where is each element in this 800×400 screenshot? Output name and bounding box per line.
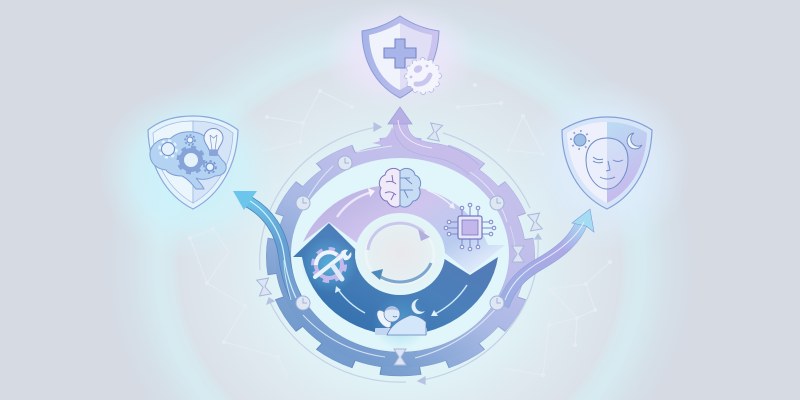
icon: sleeping person: [372, 294, 428, 350]
shield: cognition: [148, 116, 238, 209]
shield: health and pathogen defence: [362, 16, 439, 98]
cycle: lower recovery arrow: [293, 223, 498, 335]
centre hub with small arrows: [355, 213, 445, 295]
icon: brain: [379, 168, 421, 207]
constellations: [188, 83, 612, 377]
outer thin timeline arcs: [260, 123, 541, 384]
arrow: up to health shield: [372, 107, 474, 170]
arrow: right to circadian shield: [503, 209, 594, 306]
icon: microchip: [444, 203, 496, 251]
icon: crescent moon: [627, 133, 642, 149]
icon: brain with gears: [150, 132, 226, 189]
inner light ring: [291, 158, 509, 350]
icon: face: [586, 138, 628, 189]
cog ring: [272, 142, 530, 371]
icon: pathogen: [407, 60, 439, 92]
icon: moon: [412, 299, 425, 314]
clocks: [296, 156, 504, 310]
arrow: left to cognition shield: [233, 191, 296, 298]
ring channel arrows: [284, 146, 516, 358]
icon: medical cross: [384, 39, 416, 68]
icon: sun: [571, 131, 589, 149]
icon: gear and wrench: [301, 237, 357, 293]
cycle: upper sleep-to-compute arrow: [303, 185, 505, 273]
shield: circadian balance: [562, 117, 652, 209]
icon: light bulb: [204, 128, 223, 156]
hourglasses: [257, 123, 542, 365]
